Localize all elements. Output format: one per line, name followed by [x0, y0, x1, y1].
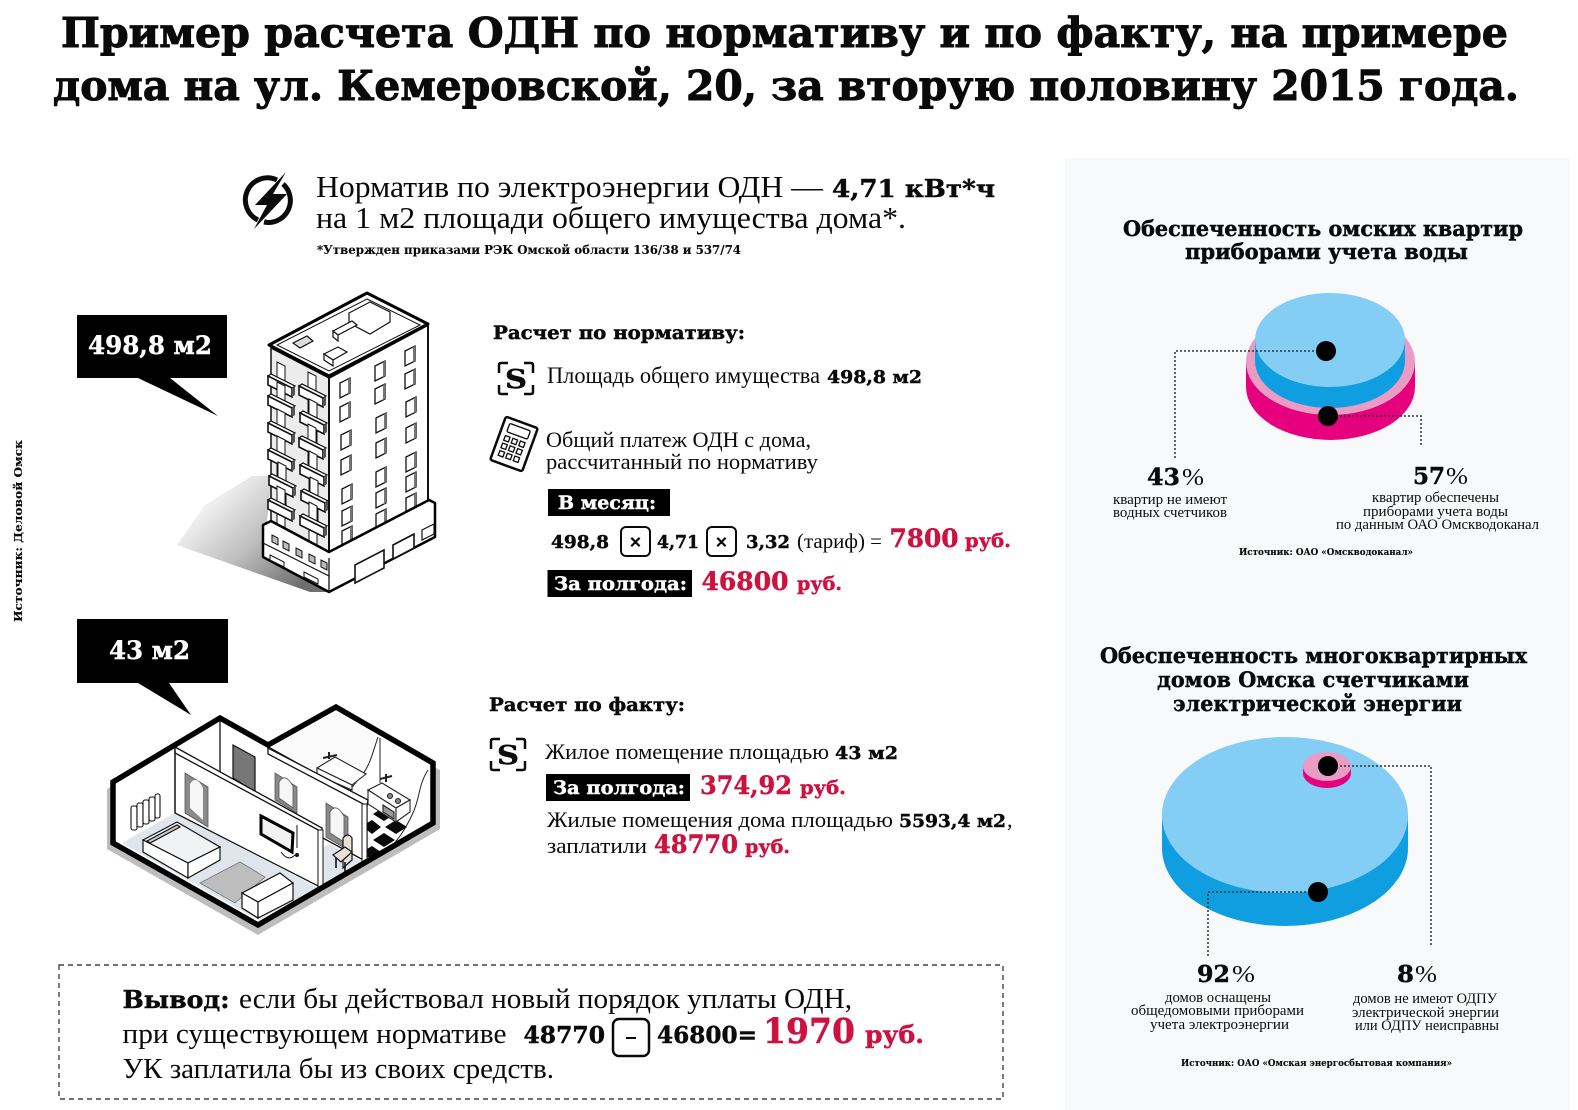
floor tiles: [367, 807, 407, 857]
conclusion box: 1970: [763, 1011, 855, 1052]
conclusion box: руб.: [865, 1020, 924, 1049]
bath: [317, 752, 366, 790]
heading: electricity meters: домов Омска счетчиками: [1157, 667, 1469, 692]
windows: [275, 773, 348, 850]
calculation by norm: рассчитанный по нормативу: [546, 449, 818, 474]
panel: right statistics background: [1065, 158, 1570, 1110]
label: 8 percent: 8: [1397, 961, 1414, 988]
calculation by fact: заплатили: [547, 833, 647, 858]
label: half-year: руб.: [800, 777, 846, 799]
icon: calculator: [490, 417, 538, 471]
calculation by fact: Жилые помещения дома площадью: [547, 807, 893, 832]
calculation by fact: [489, 694, 1012, 859]
norm text block: Норматив по электроэнергии ОДН —: [316, 169, 824, 204]
label: 8 percent: [1352, 961, 1499, 1034]
label: 43 percent: водных счетчиков: [1113, 505, 1227, 521]
label: half-year: 46800: [702, 567, 788, 596]
formula: per month: [551, 524, 1011, 556]
back wall: [220, 720, 367, 862]
formula: per month: руб.: [965, 530, 1011, 552]
conclusion box: 46800=: [657, 1022, 757, 1049]
heading: water meters: приборами учета воды: [1185, 239, 1468, 264]
calculation by norm: Общий платеж ОДН с дома,: [546, 427, 811, 452]
calculation by norm: 498,8 м2: [827, 367, 922, 388]
callout: 43 m2: [77, 619, 228, 715]
norm text block: [316, 169, 995, 257]
bed: [143, 822, 220, 878]
norm text block: на 1 м2 площади общего имущества дома*.: [316, 200, 906, 235]
label: 92 percent: учета электроэнергии: [1150, 1017, 1289, 1033]
chair: [333, 835, 352, 873]
label: 57 percent: квартир обеспечены: [1372, 490, 1499, 506]
conclusion box: Вывод:: [122, 985, 230, 1014]
label: 92 percent: 92: [1197, 961, 1230, 988]
conclusion box: УК заплатила бы из своих средств.: [122, 1053, 554, 1085]
callout: 43 m2: 43 м2: [109, 636, 190, 665]
formula: per month: ×: [715, 532, 728, 551]
calculation by fact: ,: [1007, 807, 1012, 832]
label: 8 percent: домов не имеют ОДПУ: [1353, 991, 1498, 1007]
label: 8 percent: %: [1415, 962, 1437, 988]
conclusion box: если бы действовал новый порядок уплаты ОДН,: [239, 983, 852, 1015]
label: per month: [548, 489, 670, 516]
formula: per month: (тариф) =: [797, 529, 882, 553]
label: 92 percent: %: [1232, 962, 1255, 988]
source note: vertical: Источник: Деловой Омск: [11, 439, 25, 622]
illustration: apartment building: [177, 293, 435, 592]
label: 43 percent: %: [1182, 465, 1204, 491]
heading: electricity meters: электрической энергии: [1173, 691, 1462, 716]
formula: per month: 4,71: [657, 532, 699, 553]
stove: [368, 774, 410, 822]
calculation by fact: руб.: [745, 836, 790, 858]
heading: electricity meters: [1100, 643, 1527, 716]
calculation by fact: Расчет по факту:: [489, 694, 685, 716]
calculation by norm: Расчет по нормативу:: [493, 322, 745, 344]
label: 43 percent: квартир не имеют: [1113, 492, 1228, 508]
source: electricity: Источник: ОАО «Омская энергосбытовая компания»: [1181, 1058, 1452, 1069]
label: 8 percent: или ОДПУ неисправны: [1355, 1018, 1499, 1034]
icon: area S: [491, 739, 525, 771]
calculation by norm: Площадь общего имущества: [547, 363, 820, 388]
icon: area S: S: [497, 741, 519, 771]
label: half-year: За полгода:: [553, 777, 685, 799]
illustration: apartment cutaway: [107, 707, 440, 935]
label: half-year: 374,92: [700, 771, 792, 800]
norm text block: *Утвержден приказами РЭК Омской области 136/38 и 537/74: [317, 243, 741, 257]
source: water: Источник: ОАО «Омскводоканал»: [1239, 547, 1413, 558]
heading: electricity meters: Обеспеченность многоквартирных: [1100, 643, 1527, 668]
label: half-year: [546, 771, 846, 801]
label: 57 percent: 57: [1413, 463, 1445, 490]
conclusion box: при существующем нормативе: [122, 1018, 507, 1050]
label: 92 percent: общедомовыми приборами: [1131, 1003, 1304, 1019]
callout: 498,8 m2: [77, 315, 227, 416]
label: 57 percent: приборами учета воды: [1363, 504, 1508, 520]
icon: area S: S: [505, 365, 527, 395]
calculation by fact: 5593,4 м2: [899, 811, 1006, 832]
conclusion box: 48770: [524, 1022, 605, 1049]
calculation by fact: Жилое помещение площадью: [545, 739, 829, 764]
formula: per month: ×: [629, 532, 642, 551]
label: half-year: [548, 567, 842, 597]
label: 92 percent: [1131, 961, 1304, 1033]
icon: area S: [499, 363, 533, 395]
title: Пример расчета ОДН по нормативу и по факту, на примере: [61, 9, 1508, 57]
label: 92 percent: домов оснащены: [1165, 990, 1271, 1006]
label: 43 percent: [1113, 464, 1228, 521]
icon: lightning: [245, 172, 290, 229]
label: half-year: За полгода:: [554, 573, 687, 595]
chart: water meters disk: [1175, 293, 1421, 458]
title: [53, 9, 1519, 110]
label: 57 percent: [1336, 463, 1539, 533]
calculation by norm: [490, 322, 1011, 597]
label: 43 percent: 43: [1147, 464, 1180, 491]
formula: per month: 7800: [890, 524, 958, 553]
radiator: [131, 794, 160, 830]
label: 57 percent: по данным ОАО Омскводоканал: [1336, 517, 1539, 533]
label: 57 percent: %: [1446, 464, 1468, 490]
label: 8 percent: электрической энергии: [1352, 1005, 1499, 1021]
left wall: [175, 750, 322, 888]
TV: [261, 816, 293, 852]
norm text block: 4,71 кВт*ч: [832, 174, 995, 203]
formula: per month: 3,32: [746, 532, 790, 553]
calculation by fact: 43 м2: [835, 743, 898, 764]
label: per month: В месяц:: [558, 492, 656, 514]
heading: water meters: [1123, 216, 1523, 264]
heading: water meters: Обеспеченность омских квартир: [1123, 216, 1523, 241]
conclusion box: [59, 965, 1003, 1099]
formula: per month: 498,8: [551, 532, 609, 553]
chart: electricity meters disk: [1162, 737, 1431, 957]
title: дома на ул. Кемеровской, 20, за вторую половину 2015 года.: [53, 62, 1519, 110]
carpet: [200, 862, 265, 903]
callout: 498,8 m2: 498,8 м2: [88, 331, 212, 360]
calculation by fact: 48770: [654, 830, 738, 859]
label: half-year: руб.: [797, 573, 842, 595]
sofa: [242, 873, 293, 918]
